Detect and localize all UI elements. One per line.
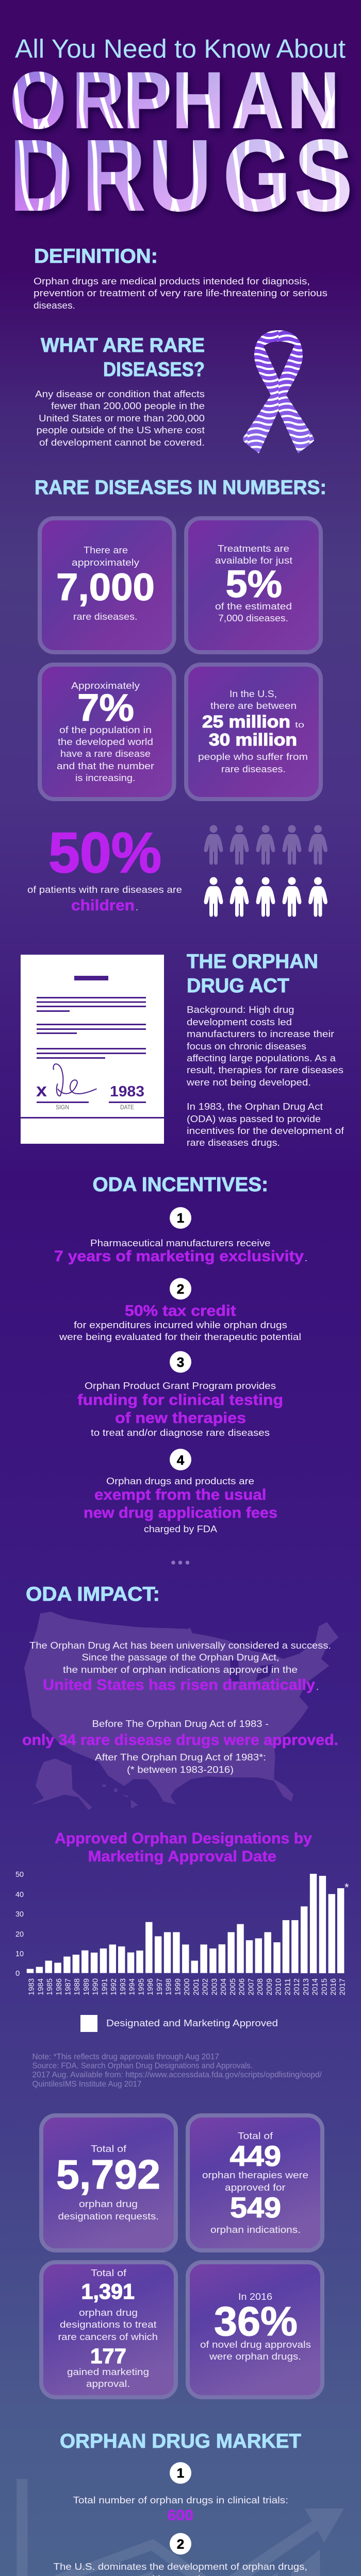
incentive 1: 1 xyxy=(177,1210,184,1226)
x axis year labels: 2009 xyxy=(265,1978,274,1995)
text block: oda impact over map: (* between 1983-2016) xyxy=(127,1765,234,1775)
card: 7% of population: of the population in xyxy=(59,725,152,735)
x axis year labels xyxy=(27,1978,347,1995)
card: 5% treatments: of the estimated xyxy=(215,601,292,612)
x axis year labels: 1990 xyxy=(91,1978,100,1995)
chart legend: Designated and Marketing Approved xyxy=(106,2018,278,2028)
card: 36% novel approvals: of novel drug approvals xyxy=(200,2340,311,2350)
card: 5,792 designation requests: Total of xyxy=(91,2144,127,2154)
chart source note: Note: *This reflects drug approvals through Aug 2017 xyxy=(32,2053,219,2061)
stat caption xyxy=(27,885,182,914)
icon row: five white people xyxy=(204,877,327,917)
card: 449 therapies, 549 indications: Total of xyxy=(238,2131,273,2141)
market point 1 xyxy=(73,2462,288,2524)
card: 25 to 30 million people: there are between xyxy=(210,701,297,711)
text block: oda impact over map: After The Orphan Drug Act of 1983*: xyxy=(95,1752,266,1762)
heading: what are rare diseases: WHAT ARE RARE xyxy=(41,334,205,357)
x axis year labels: 2014 xyxy=(310,1978,320,1995)
definition text xyxy=(34,276,327,311)
market point 1: 1 xyxy=(177,2465,184,2481)
incentive 1: 7 years of marketing exclusivity xyxy=(54,1248,304,1265)
card: 7% of population: the developed world xyxy=(58,737,153,747)
x axis year labels: 1992 xyxy=(109,1978,118,1995)
text block: oda impact over map xyxy=(22,1640,338,1775)
market point 1: 600 xyxy=(167,2507,193,2524)
act background text: development costs led xyxy=(187,1017,292,1027)
incentive 2 xyxy=(59,1278,301,1342)
card: 5% treatments: available for just xyxy=(215,555,292,566)
incentive 4: 4 xyxy=(177,1452,185,1468)
x axis year labels: 2000 xyxy=(183,1978,191,1995)
card: 7,000 rare diseases: 7,000 xyxy=(56,566,155,608)
x axis year labels: 2003 xyxy=(210,1978,219,1995)
card: 1,391 rare cancers, 177 approved: designations to treat xyxy=(60,2319,157,2330)
incentive 1 xyxy=(54,1207,307,1265)
icon: signed act document: SIGN xyxy=(56,1104,69,1111)
rare disease definition text xyxy=(35,389,205,448)
x axis year labels: 1994 xyxy=(128,1978,137,1995)
asterisk on 2017 bar: * xyxy=(344,1881,349,1894)
card: 7,000 rare diseases xyxy=(40,518,174,652)
title: orphan drugs zebra lettering xyxy=(10,56,352,232)
x axis year labels: 1999 xyxy=(173,1978,182,1995)
heading: what are rare diseases: DISEASES? xyxy=(103,359,205,381)
icon: signed act document: DATE xyxy=(120,1104,134,1111)
card: 36% novel approvals: In 2016 xyxy=(238,2292,272,2302)
card: 1,391 rare cancers, 177 approved: Total of xyxy=(91,2268,127,2278)
definition text: Orphan drugs are medical products intended for diagnosis, xyxy=(34,276,310,286)
section: the orphan drug act xyxy=(186,951,344,1148)
card: 5,792 designation requests: designation requests. xyxy=(58,2211,159,2222)
market point 1: Total number of orphan drugs in clinical trials: xyxy=(73,2495,288,2505)
x axis year labels: 1991 xyxy=(100,1978,109,1995)
x axis year labels: 1993 xyxy=(119,1978,127,1995)
x axis year labels: 1998 xyxy=(165,1978,173,1995)
x axis year labels: 1985 xyxy=(45,1978,54,1995)
card: 449 therapies, 549 indications xyxy=(188,2115,322,2250)
card: 449 therapies, 549 indications: approved for xyxy=(225,2182,286,2193)
x axis year labels: 1997 xyxy=(155,1978,164,1995)
y axis labels: 10 xyxy=(15,1950,24,1958)
card: 1,391 rare cancers, 177 approved xyxy=(41,2262,176,2397)
heading: the orphan drug act xyxy=(187,951,318,997)
act background text xyxy=(186,1005,344,1148)
dots divider xyxy=(171,1561,189,1565)
section: 50% children xyxy=(27,821,327,917)
rare disease definition text: people outside of the US where cost xyxy=(36,425,205,435)
x axis year labels: 1996 xyxy=(146,1978,155,1995)
market point 2: 2 xyxy=(177,2536,184,2552)
incentive 2: 50% tax credit xyxy=(125,1302,236,1319)
rare disease definition text: United States or more than 200,000 xyxy=(39,413,205,423)
card: 7% of population: and that the number xyxy=(57,761,154,771)
market point 2: The U.S. dominates the development of orphan drugs, xyxy=(54,2562,307,2572)
x axis year labels: 2004 xyxy=(219,1978,228,1995)
card: 7% of population: Approximately xyxy=(71,681,140,691)
x axis year labels: 1987 xyxy=(64,1978,72,1995)
card: 25 to 30 million people: 25 million xyxy=(202,712,290,731)
heading: oda impact: ODA IMPACT: xyxy=(26,1583,160,1605)
incentive 4 xyxy=(84,1449,277,1534)
heading: the orphan drug act: DRUG ACT xyxy=(187,975,289,997)
y axis labels: 50 xyxy=(15,1870,24,1879)
card: 5% treatments: 7,000 diseases. xyxy=(218,613,288,623)
icon: signed act document: x xyxy=(36,1079,47,1100)
x axis year labels: 2017 xyxy=(338,1978,347,1995)
card: 1,391 rare cancers, 177 approved: gained marketing xyxy=(67,2367,149,2377)
chart title xyxy=(55,1830,312,1865)
x axis year labels: 2010 xyxy=(274,1978,283,1995)
heading: orphan drug market: ORPHAN DRUG MARKET xyxy=(60,2430,301,2452)
y axis labels: 40 xyxy=(15,1890,24,1899)
chart title: Marketing Approval Date xyxy=(88,1848,276,1865)
act background text: focus on chronic diseases xyxy=(187,1041,306,1052)
heading: rare diseases in numbers: RARE DISEASES IN NUMBERS: xyxy=(35,477,326,499)
incentive 3 xyxy=(77,1351,283,1438)
card: 5% treatments xyxy=(186,518,321,652)
stat caption: children xyxy=(71,897,135,914)
card: 25 to 30 million people: 30 million xyxy=(209,730,297,749)
card: 7% of population: 7% xyxy=(77,686,134,729)
y axis labels: 30 xyxy=(15,1910,24,1919)
bar chart: approved orphan designations 1983-2017 xyxy=(15,1870,349,1995)
y axis labels: 20 xyxy=(15,1930,24,1939)
card: 7% of population: have a rare disease xyxy=(60,749,151,759)
card: 25 to 30 million people: people who suffer from xyxy=(198,752,308,762)
icon row: five muted people xyxy=(204,825,327,865)
card: 1,391 rare cancers, 177 approved: orphan drug xyxy=(79,2308,138,2318)
card: 5% treatments: 5% xyxy=(226,563,282,605)
card: 5,792 designation requests xyxy=(41,2115,176,2250)
chart source note xyxy=(32,2053,322,2089)
act background text: rare diseases drugs. xyxy=(187,1138,280,1148)
card: 25 to 30 million people: rare diseases. xyxy=(221,764,286,774)
text block: oda impact over map: The Orphan Drug Act has been universally considered a success. xyxy=(29,1640,331,1651)
x axis year labels: 1995 xyxy=(137,1978,145,1995)
incentive 4: new drug application fees xyxy=(84,1504,277,1521)
x axis year labels: 2001 xyxy=(192,1978,201,1995)
x axis year labels: 1986 xyxy=(55,1978,63,1995)
card: 5% treatments: Treatments are xyxy=(218,544,289,554)
incentive 1: Pharmaceutical manufacturers receive xyxy=(90,1238,270,1248)
chart source note: Source: FDA. Search Orphan Drug Designations and Approvals. xyxy=(32,2062,253,2070)
icon: signed act document xyxy=(21,955,164,1144)
x axis year labels: 2013 xyxy=(302,1978,310,1995)
card: 449 therapies, 549 indications: orphan indications. xyxy=(210,2225,301,2235)
rare disease definition text: Any disease or condition that affects xyxy=(35,389,205,399)
x axis year labels: 1984 xyxy=(36,1978,45,1995)
card: 25 to 30 million people: In the U.S, xyxy=(229,689,277,699)
x axis year labels: 2005 xyxy=(228,1978,237,1995)
card: 36% novel approvals: 36% xyxy=(214,2298,298,2344)
x axis year labels: 2016 xyxy=(329,1978,338,1995)
card: 1,391 rare cancers, 177 approved: approval. xyxy=(86,2379,130,2389)
act background text: incentives for the development of xyxy=(187,1126,344,1136)
heading: the orphan drug act: THE ORPHAN xyxy=(187,951,318,973)
bars xyxy=(27,1874,344,1973)
background chart: growth arrow and bars xyxy=(17,2479,348,2576)
incentive 3: of new therapies xyxy=(115,1410,246,1427)
card: 1,391 rare cancers, 177 approved: 177 xyxy=(90,2344,126,2368)
chart title: Approved Orphan Designations by xyxy=(55,1830,312,1847)
definition section xyxy=(34,245,327,311)
incentive 2: for expenditures incurred while orphan drugs xyxy=(74,1320,287,1330)
act background text: (ODA) was passed to provide xyxy=(187,1114,321,1124)
definition text: diseases. xyxy=(34,300,75,311)
incentive 2: were being evaluated for their therapeutic potential xyxy=(59,1332,301,1342)
icon: signed act document: 1983 xyxy=(110,1083,144,1100)
x axis year labels: 2011 xyxy=(283,1978,292,1995)
text block: oda impact over map: . xyxy=(316,1682,319,1692)
title: orphan drugs zebra lettering: DRUGS xyxy=(10,119,352,232)
stat caption: of patients with rare diseases are xyxy=(27,885,182,895)
chart legend xyxy=(80,2015,278,2032)
card: 449 therapies, 549 indications: orphan therapies were xyxy=(202,2170,308,2180)
card: 36% novel approvals xyxy=(188,2262,322,2397)
x axis year labels: 1988 xyxy=(73,1978,81,1995)
card: 7,000 rare diseases: rare diseases. xyxy=(73,612,137,622)
incentive 3: 3 xyxy=(177,1354,184,1370)
incentive 3: to treat and/or diagnose rare diseases xyxy=(91,1428,270,1438)
incentive 2: 2 xyxy=(177,1281,184,1297)
x axis year labels: 1983 xyxy=(27,1978,36,1995)
act background text: were not being developed. xyxy=(186,1077,311,1088)
y axis labels: 0 xyxy=(15,1969,20,1978)
heading: what are rare diseases xyxy=(41,334,205,381)
text block: oda impact over map: the number of orphan indications approved in the xyxy=(63,1665,298,1675)
card: 1,391 rare cancers, 177 approved: rare cancers of which xyxy=(58,2332,158,2342)
incentive 3: funding for clinical testing xyxy=(77,1392,283,1409)
card: 449 therapies, 549 indications: 549 xyxy=(230,2191,281,2224)
card: 5,792 designation requests: 5,792 xyxy=(56,2151,160,2197)
act background text: Background: High drug xyxy=(187,1005,294,1015)
act background text: In 1983, the Orphan Drug Act xyxy=(187,1101,323,1112)
big stat: 50%: 50% xyxy=(48,821,161,885)
incentive 1: . xyxy=(305,1253,307,1263)
incentive 4: Orphan drugs and products are xyxy=(106,1476,254,1486)
card: 7% of population: is increasing. xyxy=(75,773,135,783)
x axis year labels: 2007 xyxy=(247,1978,255,1995)
act background text: affecting large populations. As a xyxy=(187,1053,336,1063)
title: all you need to know about: All You Need to Know About xyxy=(15,34,346,63)
chart source note: 2017 Aug. Available from: https://www.accessdata.fda.gov/scripts/opdlisting/oopd/ xyxy=(32,2071,322,2079)
icon: zebra awareness ribbon xyxy=(243,330,314,453)
text block: oda impact over map: Before The Orphan Drug Act of 1983 - xyxy=(92,1719,269,1729)
x axis year labels: 2002 xyxy=(201,1978,210,1995)
card: 25 to 30 million people: to xyxy=(295,721,304,730)
card: 36% novel approvals: were orphan drugs. xyxy=(209,2351,301,2362)
card: 5,792 designation requests: orphan drug xyxy=(79,2199,138,2209)
incentive 4: exempt from the usual xyxy=(94,1486,266,1503)
x axis year labels: 2015 xyxy=(320,1978,329,1995)
x axis year labels: 2008 xyxy=(256,1978,265,1995)
text block: oda impact over map: Since the passage of the Orphan Drug Act, xyxy=(81,1652,280,1663)
x axis year labels: 2006 xyxy=(238,1978,247,1995)
act background text: manufacturers to increase their xyxy=(187,1029,334,1039)
card: 25 to 30 million people xyxy=(186,665,321,799)
text block: oda impact over map: only 34 rare disease drugs were approved. xyxy=(22,1732,338,1749)
incentive 4: charged by FDA xyxy=(144,1524,217,1534)
map: united states silhouette xyxy=(24,1612,338,1810)
section: what are rare diseases xyxy=(35,330,314,453)
heading: oda incentives: ODA INCENTIVES: xyxy=(93,1174,268,1196)
title block xyxy=(10,34,352,232)
card: 1,391 rare cancers, 177 approved: 1,391 xyxy=(81,2279,135,2303)
card: 7,000 rare diseases: approximately xyxy=(72,557,139,568)
x axis year labels: 1989 xyxy=(82,1978,91,1995)
incentive 3: Orphan Product Grant Program provides xyxy=(85,1381,276,1391)
rare disease definition text: fewer than 200,000 people in the xyxy=(51,401,205,411)
act background text: result, therapies for rare diseases xyxy=(187,1065,343,1075)
card: 7,000 rare diseases: There are xyxy=(84,545,128,555)
chart source note: QuintilesIMS Institute Aug 2017 xyxy=(32,2080,142,2089)
y axis labels xyxy=(15,1870,24,1978)
heading: definition: DEFINITION: xyxy=(34,245,158,267)
x axis year labels: 2012 xyxy=(292,1978,301,1995)
market point 2 xyxy=(54,2533,307,2576)
card: 449 therapies, 549 indications: 449 xyxy=(230,2140,281,2172)
rare disease definition text: of development cannot be covered. xyxy=(39,437,205,448)
title: orphan drugs zebra lettering: ORPHAN xyxy=(10,56,339,145)
definition text: prevention or treatment of very rare life-threatening or serious xyxy=(34,288,327,298)
stat caption: . xyxy=(136,902,138,912)
card: 7% of population xyxy=(40,665,174,799)
text block: oda impact over map: United States has risen dramatically xyxy=(43,1676,315,1693)
